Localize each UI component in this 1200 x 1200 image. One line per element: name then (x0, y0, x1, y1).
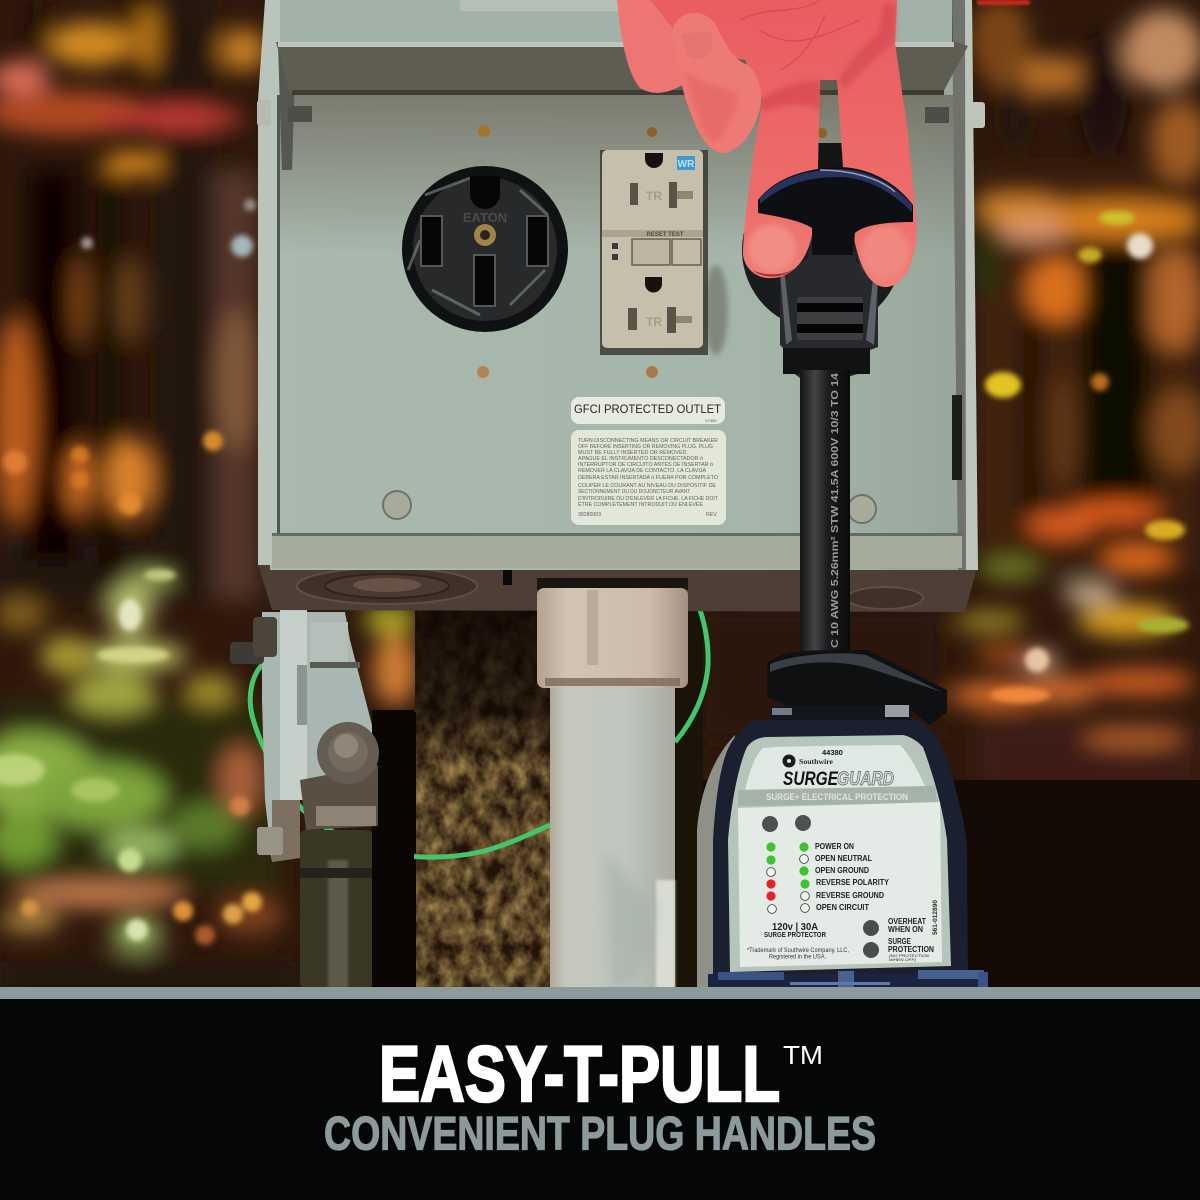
distant red object at top edge (977, 0, 1030, 5)
band text: SURGE+ ELECTRICAL PROTECTION (766, 792, 908, 802)
subheading: CONVENIENT PLUG HANDLES (324, 1106, 876, 1160)
clamp body (262, 612, 372, 862)
product band (738, 786, 937, 806)
GFCI protected outlet label: GFCI PROTECTED OUTLET (574, 402, 721, 416)
power cable (800, 370, 850, 655)
clamp side bolts (230, 642, 264, 664)
warning label (571, 430, 726, 525)
trademark note: *Trademark of Southwire Company, LLC, (747, 948, 849, 954)
surgeguard wordmark: SURGE (783, 769, 839, 790)
GFCI outlet: WR (678, 159, 695, 170)
outer finger (617, 0, 690, 93)
lower plug collar handle (767, 650, 947, 725)
button labels: WHEN ON (888, 925, 923, 934)
button labels: (NO PROTECTION (889, 953, 929, 958)
part number: 561-012890 (933, 899, 939, 935)
rivets and screws (478, 125, 490, 137)
warning label: MUST BE FULLY INSERTED OR REMOVED. (578, 450, 688, 456)
left flange (258, 0, 280, 565)
GFCI outlet: RESET TEST (646, 232, 684, 238)
status labels: OPEN CIRCUIT (816, 903, 869, 912)
hand gripping plug handle (617, 0, 917, 287)
bottom banner (0, 987, 1200, 1200)
index finger (672, 13, 761, 153)
warning label: OFF BEFORE INSERTING OR REMOVING PLUG. PLUG (578, 444, 713, 450)
GFCI outlet (600, 150, 708, 355)
box underside (258, 564, 978, 612)
status labels: POWER ON (815, 842, 854, 851)
warning label: COUPER LE COURANT AU NIVEAU DU DISPOSITIF DE (578, 483, 717, 489)
top lid (280, 0, 952, 44)
PVC conduit pipe (537, 578, 688, 990)
status labels: OPEN GROUND (815, 866, 869, 875)
status labels: REVERSE POLARITY (816, 878, 890, 887)
warning label: TURN DISCONNECTING MEANS OR CIRCUIT BREAKER (578, 438, 718, 444)
lower white panel (738, 802, 942, 967)
warning label: INTERRUPTOR DE CIRCUITO ANTES DE INSERTAR ó (578, 462, 713, 468)
warning label: DEBERA ESTAR INSERTADA ó FUERA POR COMPLETO (578, 475, 718, 481)
overheat and surge buttons (863, 920, 879, 958)
status labels: OPEN NEUTRAL (815, 854, 872, 863)
warning label: REMOVER LA CLAVIJA DE CONTACTO. LA CLAVIJA (578, 468, 707, 474)
green ground wire (250, 610, 708, 857)
rating text: 120v | 30A (772, 921, 818, 933)
surge guard device (697, 720, 988, 990)
plug body (780, 143, 878, 378)
status labels: REVERSE GROUND (816, 891, 884, 900)
warning label: REV. (706, 512, 718, 518)
status LEDs left column (766, 842, 776, 913)
warning label: SECTIONNEMENT OU DU DISJONCTEUR AVANT (578, 489, 691, 495)
device housing (697, 735, 735, 990)
device label frame (728, 735, 951, 972)
rating text (764, 921, 826, 939)
trademark symbol: TM (783, 1040, 823, 1070)
button labels: SURGE (888, 937, 912, 946)
surgeguard wordmark (783, 769, 894, 790)
GFCI outlet: TR (646, 189, 662, 203)
button labels: PROTECTION (888, 945, 934, 954)
status labels (815, 842, 890, 912)
clamp bolt (317, 722, 379, 784)
warning label: D'INTRODUIRE OU D'ENLEVER LA FICHE. LA FICHE DOIT (578, 496, 719, 502)
upper white panel (745, 745, 925, 790)
lower rusted pipe (300, 830, 373, 988)
50 amp black receptacle (402, 166, 568, 332)
blue base clips (708, 970, 988, 988)
button labels (888, 917, 934, 962)
bottom lip (272, 535, 962, 568)
warning label: 38280003 (578, 512, 601, 518)
rear round receptacle behind plug (742, 170, 902, 330)
palm, middle and ring fingers (650, 0, 917, 287)
status LEDs right column (799, 842, 810, 912)
button labels: OVERHEAT (888, 917, 926, 926)
warning label: ÊTRE COMPLÈTEMENT INTRODUIT OU ENLEVÉE (578, 500, 704, 508)
trademark note: Registered in the USA. (769, 954, 826, 960)
top indicator sockets (762, 815, 811, 832)
ground clamp and rusted pipe (230, 610, 414, 990)
GFCI protected outlet label (571, 397, 725, 424)
fingernail (680, 31, 712, 59)
right flange (952, 0, 978, 570)
trademark note (747, 948, 849, 960)
model number: 44380 (822, 748, 843, 757)
Southwire logo (782, 754, 833, 768)
rating text: SURGE PROTECTOR (764, 932, 826, 939)
GFCI protected outlet label: X7450 (705, 418, 717, 423)
T-grip handle (758, 167, 913, 255)
headline: EASY-T-PULL (379, 1029, 780, 1118)
warning label: APAGUE EL INSTRUMENTO DESCONECTADOR ó (578, 456, 703, 462)
surgeguard wordmark: GUARD (837, 769, 894, 790)
button labels: WHEN OFF) (889, 957, 917, 962)
Southwire logo: Southwire (799, 758, 833, 766)
electrical pedestal box (257, 0, 985, 612)
wooden post (380, 600, 703, 990)
GFCI outlet: TR (646, 315, 662, 329)
50 amp black receptacle: EATON (463, 210, 507, 225)
box front face (270, 70, 965, 570)
cable print: C 10 AWG 5.26mm² STW 41.5A 600V 10/3 TO 14 (830, 372, 841, 648)
